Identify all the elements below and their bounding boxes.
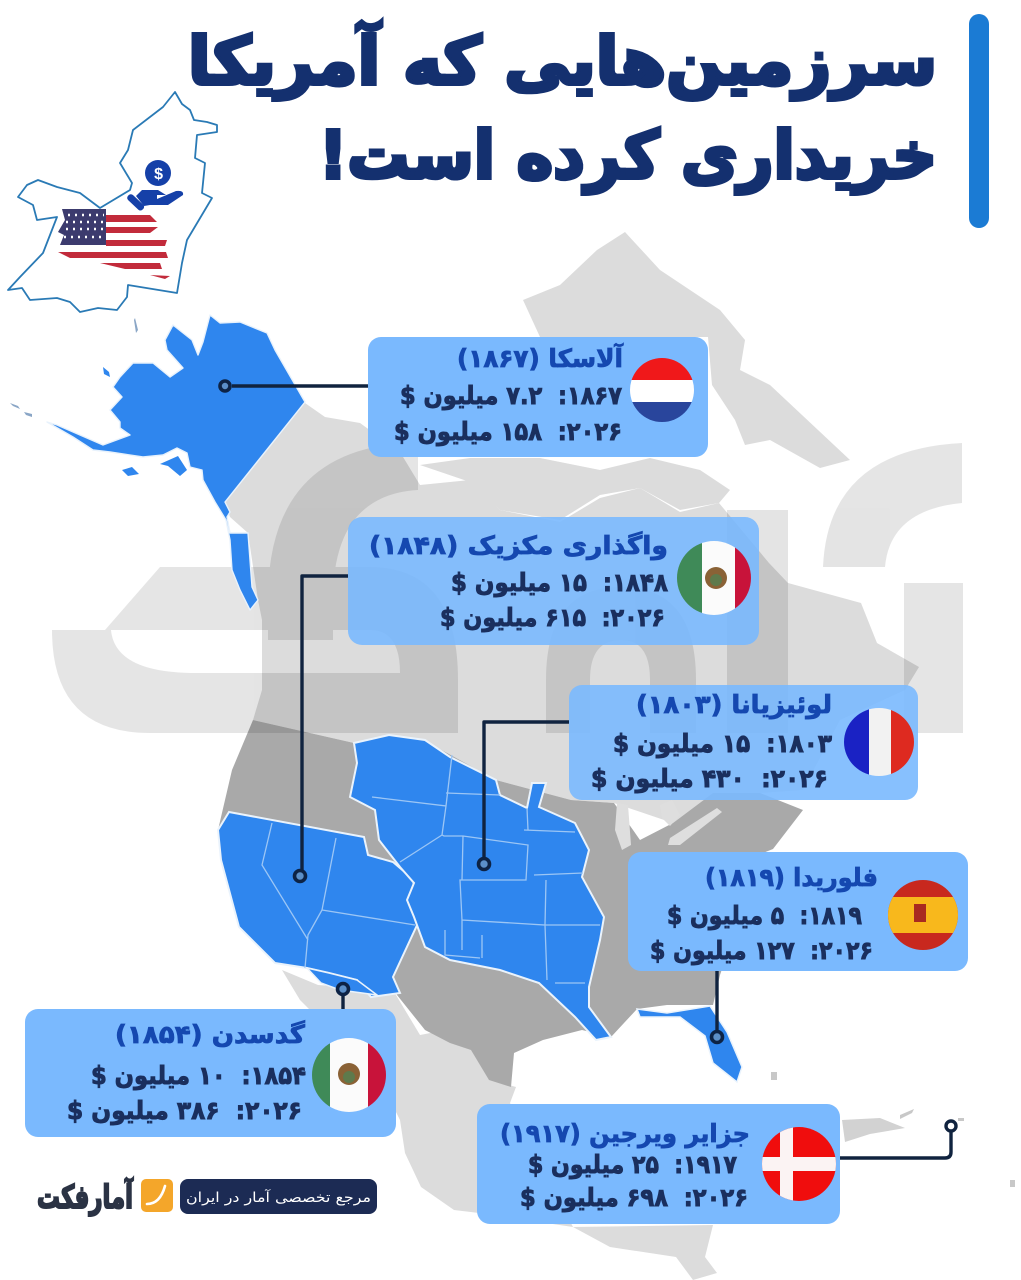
panel: Gadsden: ۱۸۵۴: ۱۰ میلیون $ — [91, 1061, 306, 1091]
money hand — [126, 160, 183, 212]
panel: Louisiana: لوئیزیانا (۱۸۰۳) — [636, 690, 832, 720]
Cuba — [842, 1118, 905, 1142]
watermark logo — [52, 443, 963, 733]
flag: Netherlands — [630, 358, 694, 423]
Mexico and Central America — [282, 970, 717, 1280]
connector: Louisiana — [478, 722, 569, 870]
United States lower 48 — [218, 720, 803, 1087]
watermark ring letter — [546, 587, 696, 733]
US flag — [58, 209, 170, 279]
panel: Mexican cession — [348, 517, 759, 645]
Arctic islands — [420, 458, 730, 520]
panel: Virgin Islands: ۱۹۱۷: ۲۵ میلیون $ — [528, 1150, 737, 1180]
footer badge: source tagline: مرجع تخصصی آمار در ایران — [186, 1189, 371, 1206]
panel: Louisiana — [569, 685, 918, 800]
panel: Florida: ۲۰۲۶: ۱۲۷ میلیون $ — [650, 936, 873, 966]
flag: Mexico — [677, 541, 751, 615]
title — [188, 20, 937, 194]
Louisiana state borders — [372, 755, 600, 983]
panel: Louisiana: ۱۸۰۳: ۱۵ میلیون $ — [613, 729, 832, 759]
panel: Louisiana: ۲۰۲۶: ۴۳۰ میلیون $ — [591, 764, 828, 794]
panel: Gadsden: ۲۰۲۶: ۳۸۶ میلیون $ — [67, 1096, 302, 1126]
panel: Mexican cession: واگذاری مکزیک (۱۸۴۸) — [369, 531, 668, 561]
watermark right letter — [823, 443, 963, 733]
panel: Florida — [628, 852, 968, 971]
Alaska territory — [10, 315, 305, 610]
connector: Gadsden — [338, 984, 348, 1009]
money hand: $ — [154, 166, 163, 183]
panel: Alaska: آلاسکا (۱۸۶۷) — [457, 343, 624, 373]
flag: Mexico — [312, 1038, 386, 1112]
Alaska islands — [103, 367, 187, 476]
Great Lakes — [615, 800, 722, 850]
icon: map outline with US flag and money hand — [8, 92, 217, 312]
panel: Alaska: ۱۸۶۷: ۷.۲ میلیون $ — [400, 381, 622, 411]
Greenland and Baffin landmass — [523, 232, 850, 468]
watermark bar letter — [727, 510, 788, 733]
logo: wordmark: آمارفکت — [37, 1177, 134, 1216]
cession state borders — [262, 823, 415, 968]
accent bar — [969, 14, 989, 228]
Canada — [225, 403, 919, 823]
footer badge: source tagline — [180, 1179, 377, 1214]
panel: Virgin Islands — [477, 1104, 840, 1224]
connector: Florida — [712, 971, 722, 1042]
panel: Gadsden — [25, 1009, 396, 1137]
Louisiana purchase territory — [350, 735, 611, 1040]
connector: Alaska — [220, 381, 368, 391]
flag: Denmark — [760, 1126, 838, 1202]
title: سرزمین‌هایی که آمریکا — [188, 20, 937, 100]
connector: Virgin Islands — [840, 1121, 956, 1158]
Florida territory — [637, 1006, 742, 1082]
title: خریداری کرده است! — [319, 117, 937, 194]
panel: Gadsden: گدسدن (۱۸۵۴) — [115, 1020, 305, 1049]
map outline — [8, 92, 217, 312]
logo: orange square — [141, 1179, 173, 1212]
panel: Virgin Islands: جزایر ویرجین (۱۹۱۷) — [500, 1119, 750, 1149]
Gadsden purchase territory — [307, 968, 377, 995]
background map: North America — [218, 232, 1015, 1280]
panel: Virgin Islands: ۲۰۲۶: ۶۹۸ میلیون $ — [520, 1183, 748, 1213]
panel: Mexican cession: ۱۸۴۸: ۱۵ میلیون $ — [451, 568, 668, 598]
small islands — [771, 1072, 1015, 1187]
Mexican cession territory — [218, 812, 418, 997]
connector: Mexican cession — [294, 576, 348, 882]
panel: Florida: ۱۸۱۹: ۵ میلیون $ — [667, 901, 862, 931]
panel: Florida: فلوریدا (۱۸۱۹) — [705, 863, 878, 893]
panel: Alaska — [368, 337, 708, 457]
watermark middle arc — [268, 443, 418, 640]
watermark left letter — [52, 567, 458, 733]
flag: Spain — [888, 880, 958, 950]
panel: Alaska: ۲۰۲۶: ۱۵۸ میلیون $ — [394, 417, 622, 447]
panel: Mexican cession: ۲۰۲۶: ۶۱۵ میلیون $ — [440, 603, 665, 633]
flag: France — [844, 708, 915, 776]
